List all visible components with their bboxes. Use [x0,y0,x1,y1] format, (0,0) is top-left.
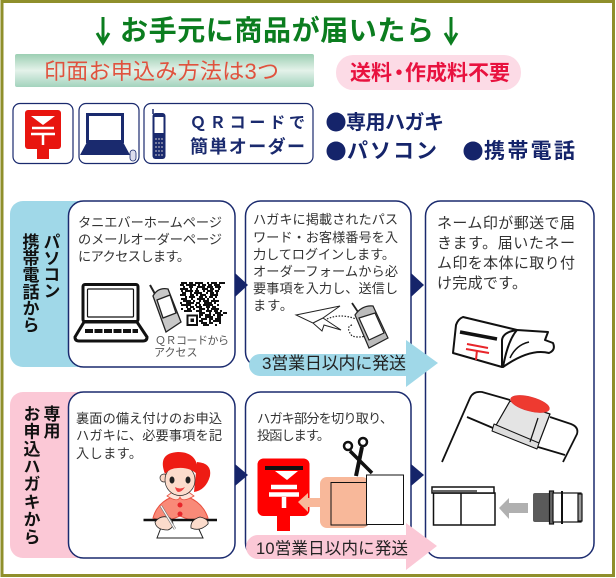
arrow: ship within 10 business days: 10営業日以内に発送 [256,539,408,558]
text: login and send: ます。 [253,298,293,313]
text: access by QR code: アクセス [154,346,197,359]
arrow: step 1 to step 2, postcard [235,464,248,486]
side tab: postcard: 専用 [40,405,60,440]
panel: postcard step 2 [246,392,411,558]
text: login and send [253,212,398,313]
text: fill in the postcard: 裏面の備え付けのお申込 [76,411,222,426]
text: cut and post [257,411,393,443]
QR order box [144,104,313,164]
text: login and send: ハガキに掲載されたパス [253,212,398,227]
list of order methods [326,111,575,163]
arrow: step 2 to delivery, postcard [411,464,424,486]
icon: mobile phone [152,109,166,159]
text: access by QR code [154,334,229,359]
list of order methods: パソコン [347,140,437,163]
arrow: ship within 10 business days [246,523,437,570]
text: access the page: タニエバーホームページ [78,215,222,230]
panel: delivery and assembly [426,201,594,558]
text: login and send: 要事項を入力し、送信し [253,281,398,296]
panel: postcard step 1 [68,392,235,558]
arrow: step 1 to step 2, PC [235,273,248,297]
side tab: PC and mobile [10,201,100,367]
text: access the page: のメールオーダーページ [78,232,222,247]
text: login and send: ワード・お客様番号を入 [253,230,398,245]
label: QR code easy order: ＱＲコードで [190,115,305,132]
arrow: insert stamp [499,498,528,519]
text: fill in the postcard: 入します。 [76,446,142,461]
text: cut and post: 投函します。 [257,428,330,443]
text: stamp arrives by mail [437,215,575,292]
icon: scissors [344,438,372,476]
side tab: postcard: お申込ハガキから [20,405,40,545]
text: stamp arrives by mail: きます。届いたネー [437,235,575,252]
illustration: woman writing [144,452,217,538]
text: access the page: にアクセスします。 [78,249,190,264]
arrow: ship within 3 business days [249,340,438,387]
badge: no fees: 作成料不要 [405,61,510,85]
list of order methods: 専用ハガキ [346,111,444,134]
text: access the page [78,215,222,264]
icon: phone sending [327,303,388,348]
text: fill in the postcard: ハガキに、必要事項を記 [76,428,222,443]
text: stamp arrives by mail: ネーム印が郵送で届 [437,215,575,232]
text: login and send: オーダーフォームから必 [253,264,398,279]
icon: mailbox [453,317,554,367]
text: access by QR code: ＱＲコードから [155,334,229,347]
icon: stamp in holder [442,392,577,462]
arrow: step 2 to delivery, PC [411,273,424,297]
icon: computer [79,104,139,164]
text: cut and post: ハガキ部分を切り取り、 [257,411,393,426]
title: お手元に商品が届いたら [120,14,434,46]
icon: phone [150,285,181,332]
arrow: ship within 3 business days: 3営業日以内に発送 [262,354,406,373]
text: fill in the postcard [76,411,222,461]
icon: laptop [75,284,147,341]
panel: PC step 1 [68,201,235,367]
banner: three ways to order [15,54,314,87]
icon: stamp part [533,491,582,524]
side tab: PC and mobile: パソコン [40,233,60,299]
QR code [180,283,227,325]
badge: no fees: ・ [388,62,410,85]
text: stamp arrives by mail: ム印を本体に取り付 [437,255,575,272]
badge: no fees: 送料 [350,62,392,85]
icon: paper plane [296,306,341,331]
label: QR code easy order: 簡単オーダー [190,136,305,157]
panel: PC step 2 [246,201,411,367]
icon: stamp case [432,487,495,525]
badge: no fees [336,55,521,90]
icon: post box [13,104,73,164]
arrow: into post box [298,477,369,528]
side tab: PC and mobile: 携帯電話から [20,233,39,333]
banner: three ways to order: 印面お申込み方法は3つ [44,59,279,84]
icon: red post box [258,458,310,531]
text: stamp arrives by mail: け完成です。 [437,275,527,292]
side tab: postcard [10,392,100,558]
list of order methods: 携帯電話 [484,140,575,163]
postcard with cut line [331,475,404,525]
label: QR code easy order [190,115,305,157]
text: login and send: 力してログインします。 [253,247,395,262]
